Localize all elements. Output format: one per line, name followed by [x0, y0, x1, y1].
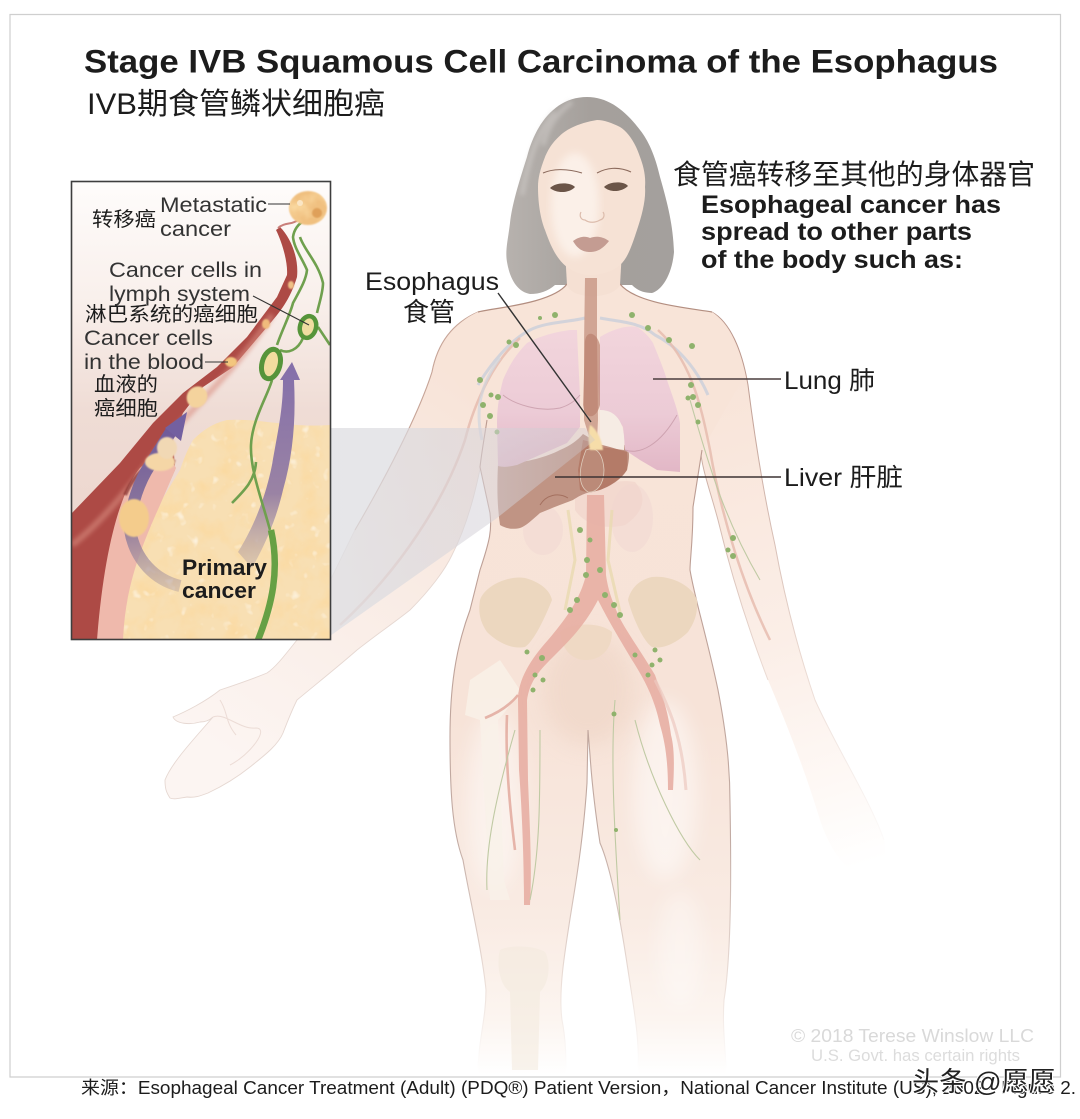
shoulder arm outline: [355, 312, 478, 530]
callout: spread to other parts: spread to other parts: [701, 218, 972, 246]
source line: 来源：Esophageal Cancer Treatment (Adult) (PDQ®) Patient Version，National Cancer Institute (US), 2002-. Figure 2.: [81, 1078, 1076, 1098]
copyright: U.S. Govt. has certain rights: [811, 1046, 1020, 1065]
lung: left: [598, 327, 680, 472]
blood vessel: [72, 227, 297, 640]
torso and legs: [440, 284, 742, 1075]
label: primary cancer: cancer: [182, 578, 256, 603]
label: liver: Liver 肝脏: [784, 464, 903, 492]
label: cancer cells in lymph: lymph system: [109, 283, 250, 306]
label: metastatic cancer: 转移癌: [92, 208, 156, 231]
label: esophagus: [365, 268, 591, 422]
label: esophagus: Esophagus: [365, 268, 499, 296]
metastatic cancer mass: [289, 191, 327, 225]
neck: [565, 250, 622, 296]
zoom beam from inset to esophagus: [330, 428, 595, 636]
lymph node lower: [258, 347, 284, 381]
title: [84, 44, 998, 121]
nose: [580, 212, 604, 222]
arm: patient right with hand: [165, 312, 487, 799]
label: primary cancer: [182, 555, 268, 603]
thigh shading: [468, 648, 697, 940]
esophagus: [584, 278, 598, 440]
lumen rim: [125, 460, 175, 495]
kidneys: [523, 505, 563, 555]
shoulder outline: [478, 284, 712, 312]
hair: [506, 97, 674, 294]
label: cancer cells in lymph: 淋巴系统的癌细胞: [85, 303, 258, 326]
femur head and shaft: [465, 660, 520, 900]
lymph node upper: [297, 314, 319, 340]
callout: spread to other parts: [673, 159, 1035, 274]
purple arrow to blood: [130, 430, 180, 586]
callout: spread to other parts: of the body such as:: [701, 246, 963, 274]
heart area: [600, 410, 624, 450]
label: cancer cells in blood: 癌细胞: [94, 397, 158, 420]
gallbladder detail: [540, 495, 568, 505]
lymph nodes: [477, 312, 736, 832]
arrowhead left: [165, 412, 187, 441]
label: cancer cells in lymph: [85, 259, 309, 326]
heart-side trachea: [583, 334, 600, 416]
primary tumour mass: [123, 420, 330, 640]
inset background: [72, 182, 330, 639]
lung: right: [497, 330, 580, 467]
vessel inner lumen: [97, 459, 176, 640]
label: metastatic cancer: [92, 194, 290, 241]
arm: patient left with hand: [700, 312, 885, 878]
eyes: [550, 182, 628, 192]
label: metastatic cancer: Metastatic: [160, 194, 267, 217]
label: cancer cells in blood: 血液的: [94, 373, 158, 396]
lymph vessels: [487, 400, 760, 920]
vessel highlight: [72, 315, 272, 545]
callout: spread to other parts: 食管癌转移至其他的身体器官: [673, 159, 1035, 190]
torso outline: [450, 420, 731, 1075]
inset border: [72, 182, 330, 640]
vessel thin end: [278, 220, 298, 228]
inset panel: cancer spread: [72, 182, 330, 640]
spine detail: [565, 510, 620, 612]
stomach: [580, 449, 604, 492]
femoral branch: [485, 695, 518, 850]
title: IVB期食管鳞状细胞癌: [87, 88, 385, 121]
label: esophagus: 食管: [403, 297, 455, 327]
aorta: [518, 495, 674, 905]
label: cancer cells in blood: Cancer cells: [84, 327, 213, 350]
illustration: female body with organs: [165, 97, 885, 1075]
vessels across chest: [478, 318, 708, 395]
arm outline left: [700, 312, 884, 840]
sacrum: [560, 624, 612, 660]
hair highlights: [522, 102, 572, 195]
label: cancer cells in lymph: Cancer cells in: [109, 259, 262, 282]
title: Stage IVB Squamous Cell Carcinoma of the Esophagus: [84, 44, 998, 80]
label: primary cancer: Primary: [182, 555, 268, 580]
label: cancer cells in blood: [84, 327, 228, 420]
liver: [497, 434, 629, 529]
tumour texture: [123, 420, 330, 640]
face: [538, 120, 645, 275]
label: cancer cells in blood: in the blood: [84, 351, 204, 374]
lips: [573, 237, 609, 252]
liver shading right lobe: [578, 440, 627, 492]
label: lung: Lung 肺: [784, 367, 875, 395]
vessels in arms: [340, 330, 770, 640]
knee and shin bones: [498, 946, 549, 1070]
purple arrow to lymph: [238, 362, 300, 568]
watermark: 头条 @愿愿: [912, 1067, 1056, 1097]
copyright: © 2018 Terese Winslow LLC: [791, 1026, 1034, 1046]
callout: spread to other parts: Esophageal cancer has: [701, 191, 1001, 219]
lymph vessels: [232, 220, 330, 530]
lung fissures: [503, 395, 677, 451]
face highlight: [551, 153, 599, 257]
hand lines: [213, 700, 261, 765]
eyebrows: [543, 168, 631, 173]
cancer clusters in vessel: [119, 281, 294, 537]
label: metastatic cancer: cancer: [160, 218, 231, 241]
hips: [479, 577, 697, 648]
tumor: [588, 425, 603, 450]
stomach and pancreas: [575, 481, 642, 527]
copyright: [791, 1026, 1034, 1065]
